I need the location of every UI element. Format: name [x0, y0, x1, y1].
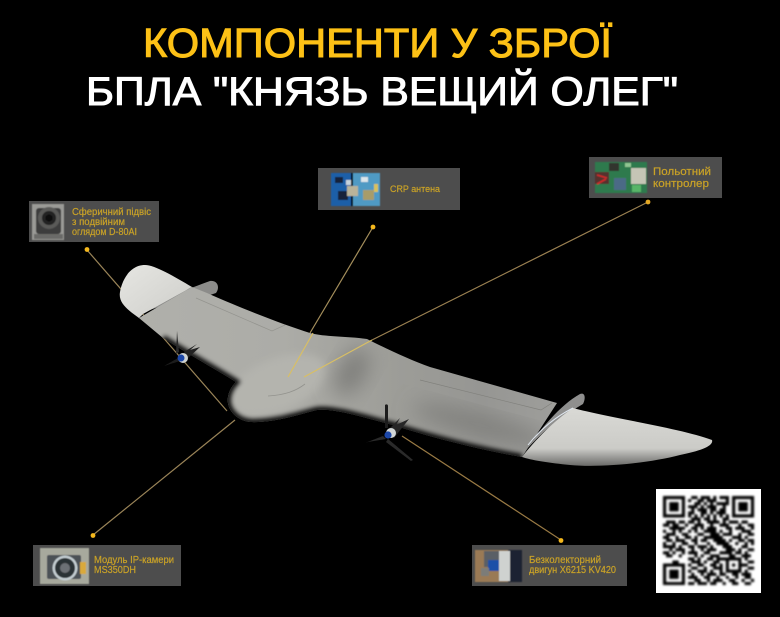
icon: motor photo: [475, 550, 522, 582]
label text: Безколекторний: [529, 555, 601, 566]
leader line: gimbal: [85, 247, 227, 411]
left control surface outline: [196, 298, 285, 331]
shaded band behind fuselage: [328, 345, 374, 400]
label text: MS350DH: [94, 565, 136, 576]
left winglet: [143, 281, 218, 313]
right wing tip: [522, 408, 712, 466]
fuselage highlight: [228, 357, 324, 409]
panel: CRP antenna: [318, 168, 460, 210]
icon: controller board photo: [595, 162, 647, 193]
leader line: flight controller: [304, 200, 650, 377]
QR code: [656, 489, 761, 593]
label text: Модуль IP-камери: [94, 555, 174, 566]
panel: IP camera module: [33, 545, 181, 586]
left wing tip: [120, 265, 192, 318]
panel: brushless motor: [472, 545, 627, 586]
trailing edge shadow: [163, 338, 522, 457]
title line 2: БПЛА "КНЯЗЬ ВЕЩИЙ ОЛЕГ": [86, 69, 678, 114]
label text: Сферичний підвіс: [72, 206, 151, 218]
fuselage hatch line: [268, 384, 305, 396]
icon: gimbal photo: [32, 204, 64, 240]
label text: контролер: [653, 178, 709, 190]
icon: camera photo: [40, 548, 89, 584]
drone: [120, 265, 712, 470]
label text: Польотний: [653, 166, 711, 178]
right wing tip edge: [528, 408, 573, 445]
wing and fuselage: [139, 287, 557, 457]
panel: spherical gimbal: [29, 201, 159, 242]
right control surface outline: [420, 380, 552, 410]
label text: оглядом D-80AI: [72, 227, 137, 238]
right winglet: [526, 394, 585, 450]
title line 1: КОМПОНЕНТИ У ЗБРОЇ: [143, 20, 613, 66]
leader line: CRP antenna: [288, 225, 375, 377]
panel: flight controller: [589, 157, 722, 198]
icon: antenna board photo: [331, 173, 380, 206]
leader line: motor: [402, 436, 563, 543]
left propeller: [164, 331, 200, 366]
leader line: IP camera: [91, 420, 235, 538]
title: [86, 20, 678, 114]
label text: з подвійним: [72, 217, 125, 228]
label text: двигун X6215 KV420: [529, 565, 616, 576]
right propeller: [365, 404, 413, 461]
label text: CRP антена: [390, 184, 440, 194]
